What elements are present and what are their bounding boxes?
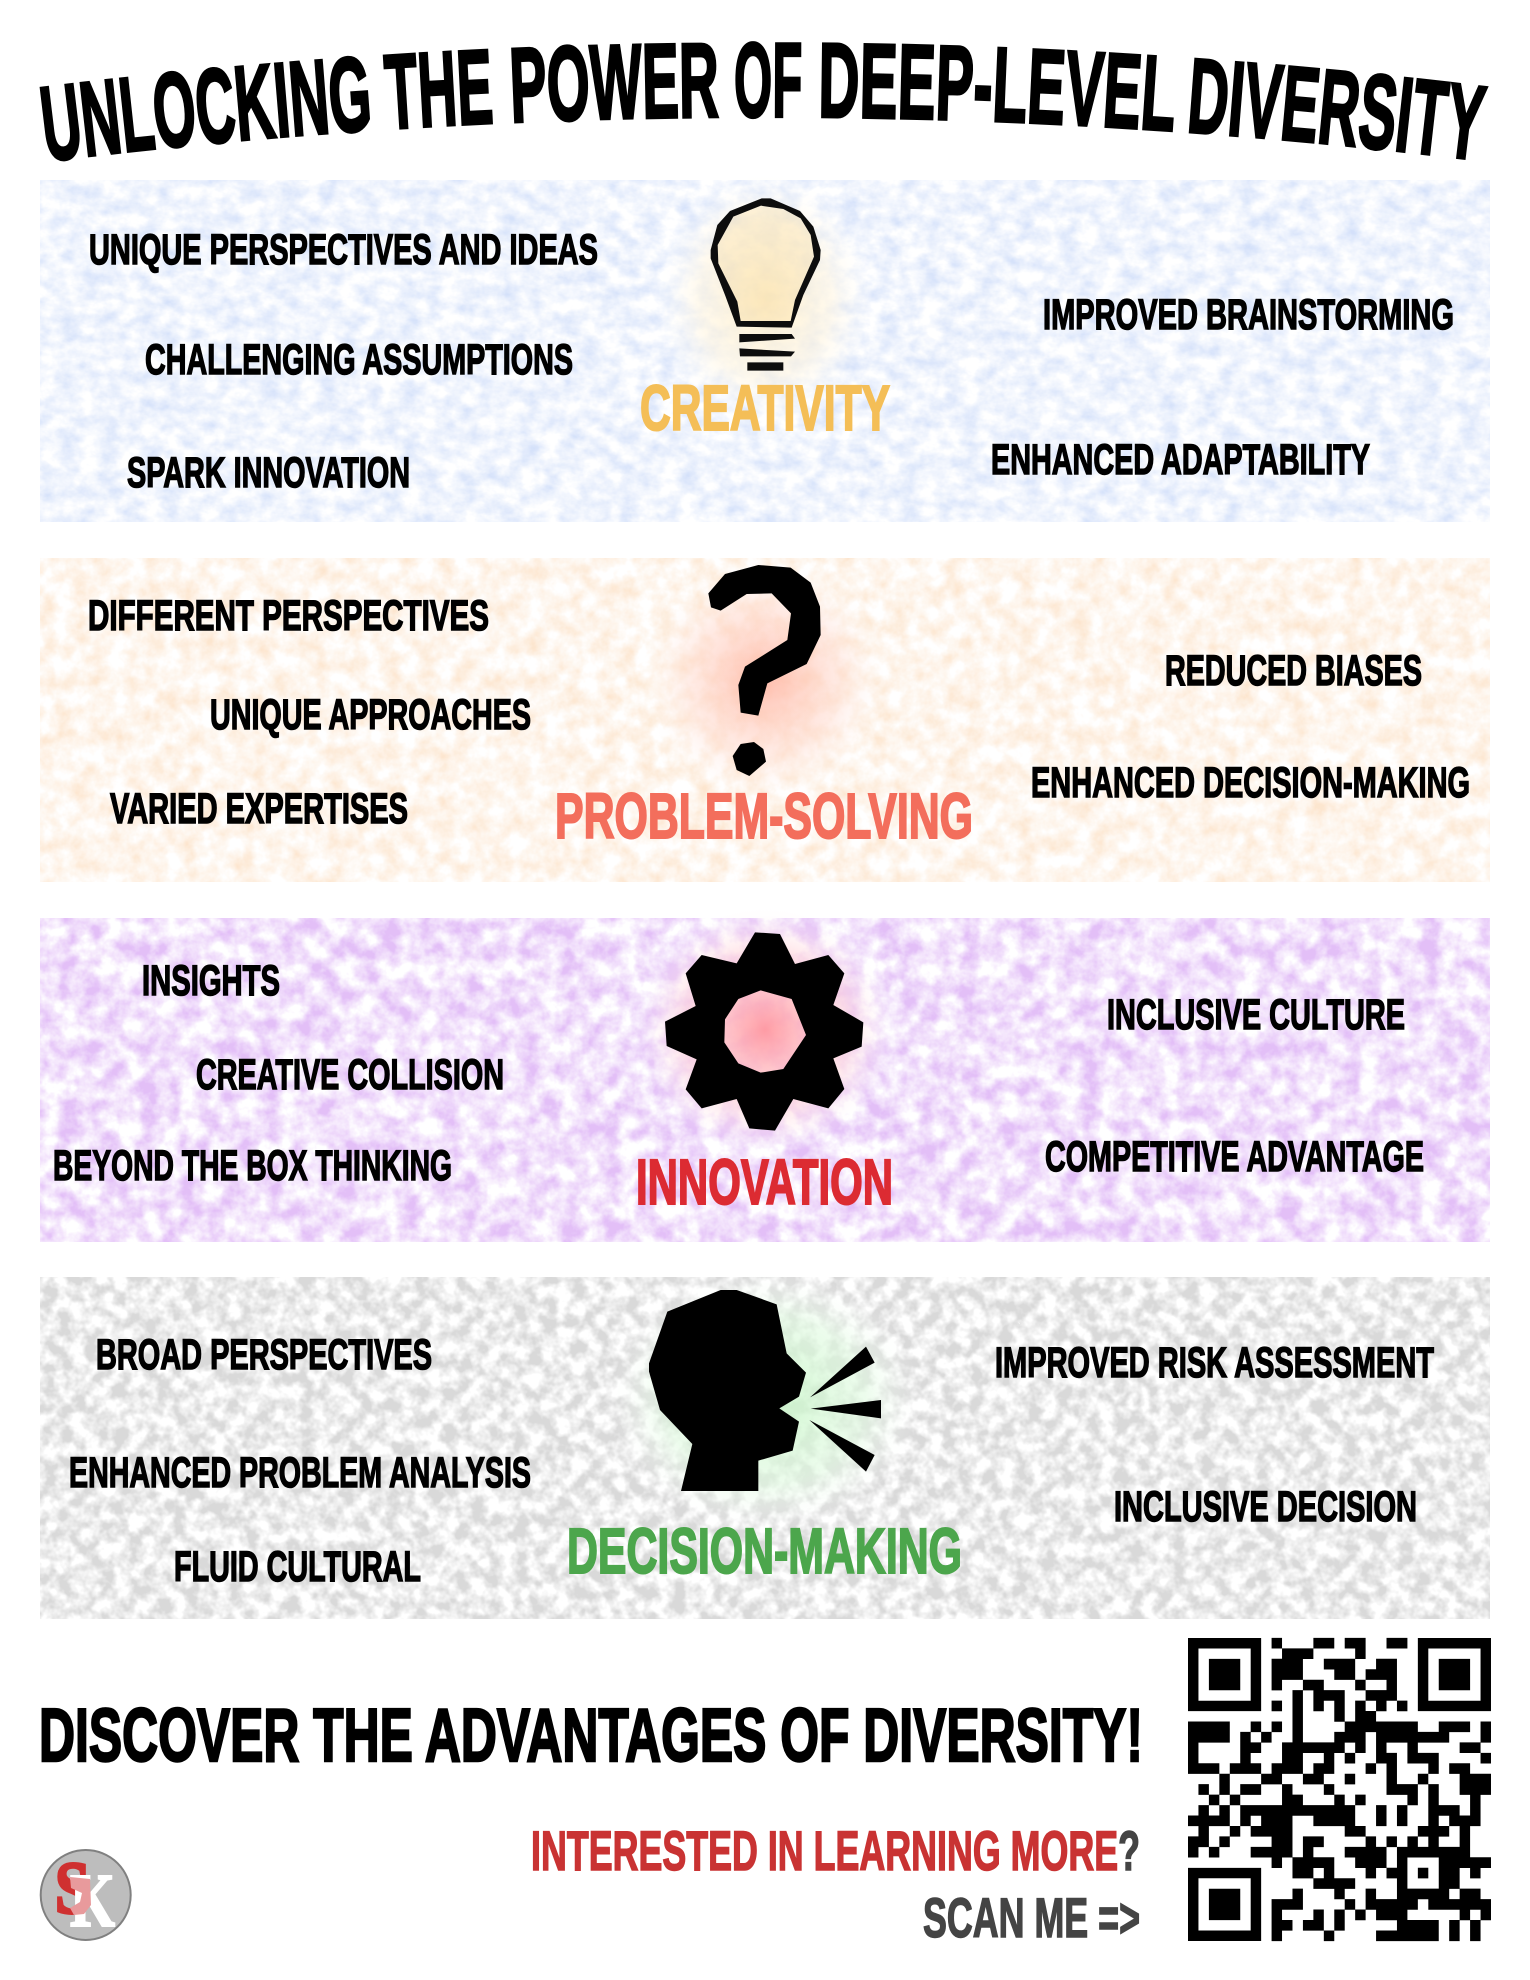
title: OF <box>735 41 802 120</box>
point: different perspectives: DIFFERENT PERSPECTIVES <box>88 592 489 640</box>
panel background: peach texture <box>40 558 1490 882</box>
icon glow: red <box>640 555 890 805</box>
icon: light bulb <box>711 198 821 371</box>
heading: decision-making: DECISION-MAKING <box>567 1515 962 1587</box>
panel background: blue texture <box>40 180 1490 522</box>
point: varied expertises: VARIED EXPERTISES <box>110 785 408 833</box>
logo: SK badge: K <box>70 1859 115 1943</box>
panel background: grey texture <box>40 1277 1490 1619</box>
logo: SK badge: S <box>55 1848 90 1930</box>
point: enhanced problem analysis: ENHANCED PROBLEM ANALYSIS <box>69 1449 531 1497</box>
icon glow: green <box>610 1270 920 1530</box>
point: fluid cultural: FLUID CULTURAL <box>174 1543 421 1591</box>
point: creative collision: CREATIVE COLLISION <box>196 1051 504 1099</box>
title: THE <box>382 48 493 130</box>
heading: innovation: INNOVATION <box>636 1146 893 1218</box>
icon: speaking head <box>649 1290 881 1491</box>
icon: question mark <box>708 565 821 776</box>
panel: problem-solving <box>40 555 1490 882</box>
title: POWER <box>511 42 720 124</box>
point: broad perspectives: BROAD PERSPECTIVES <box>96 1331 432 1379</box>
point: unique approaches: UNIQUE APPROACHES <box>210 691 531 739</box>
QR code <box>1188 1638 1491 1941</box>
prompt: scan me: SCAN ME => <box>923 1886 1140 1949</box>
title: UNLOCKING <box>40 56 370 162</box>
icon glow: yellow <box>655 170 875 430</box>
point: insights: INSIGHTS <box>142 957 280 1005</box>
icon: gear <box>665 932 863 1131</box>
panel: innovation <box>40 905 1490 1242</box>
panel: decision-making <box>40 1270 1490 1619</box>
title: DEEP-LEVEL <box>821 42 1174 132</box>
panel: creativity <box>40 170 1490 522</box>
logo: SK badge <box>41 1848 131 1943</box>
heading: problem-solving: PROBLEM-SOLVING <box>555 780 973 852</box>
panel background: lilac texture <box>40 918 1490 1242</box>
heading: creativity: CREATIVITY <box>640 372 890 444</box>
prompt: interested in learning more: INTERESTED IN LEARNING MORE? <box>531 1819 1140 1882</box>
point: unique perspectives and ideas: UNIQUE PERSPECTIVES AND IDEAS <box>89 226 598 274</box>
point: spark innovation: SPARK INNOVATION <box>127 449 410 497</box>
point: beyond the box thinking: BEYOND THE BOX THINKING <box>53 1142 452 1190</box>
point: challenging assumptions: CHALLENGING ASSUMPTIONS <box>145 336 573 384</box>
title <box>40 41 1489 162</box>
title: DIVERSITY <box>1188 58 1489 160</box>
icon glow: pink <box>635 905 895 1155</box>
